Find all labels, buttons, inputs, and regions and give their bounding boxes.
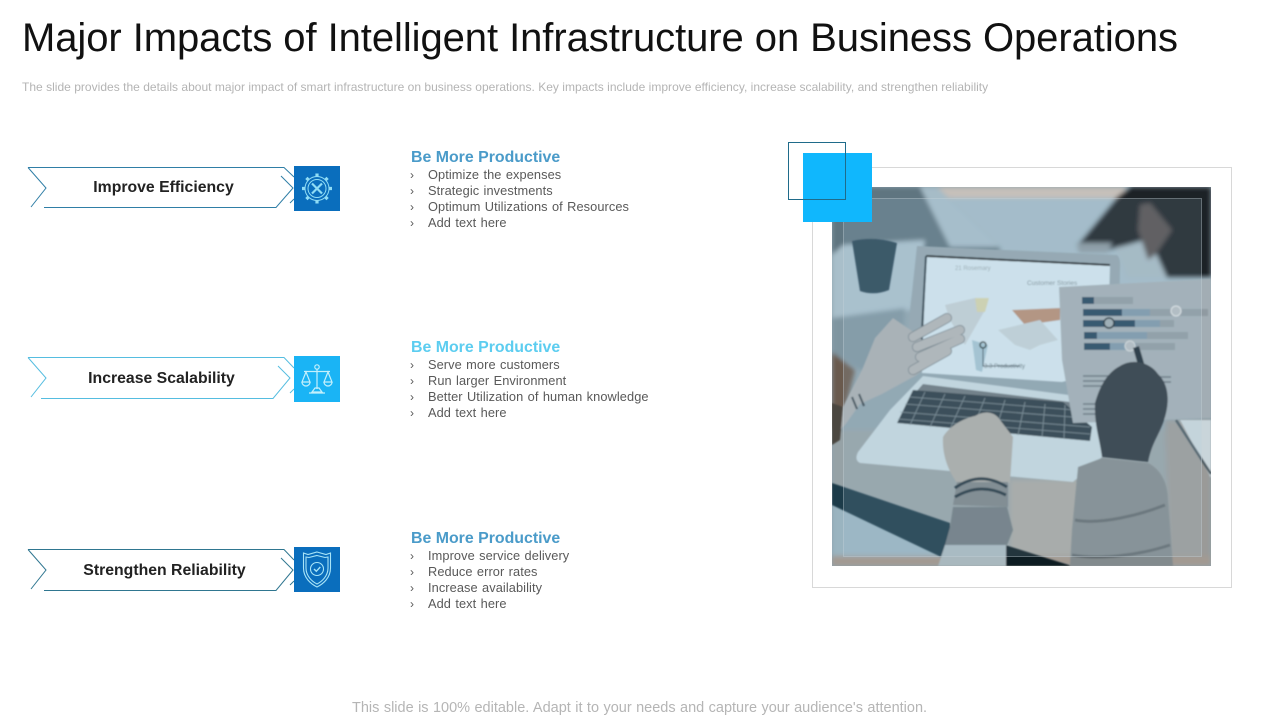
text block: increase scalability details: › [410, 374, 414, 388]
table [832, 430, 833, 436]
text block: improve efficiency details: Be More Productive [411, 149, 560, 166]
text block: increase scalability details: › [410, 406, 414, 420]
middle hand [943, 413, 1013, 483]
translucent inner overlay [844, 198, 1202, 556]
text block: strengthen reliability details: Be More Productive [411, 530, 560, 547]
text block: improve efficiency details [410, 149, 629, 230]
world map [945, 298, 985, 345]
icon: gear with tools [294, 166, 340, 211]
photo: hands at laptop with charts [832, 187, 1211, 566]
label: improve efficiency: Improve Efficiency [93, 178, 234, 196]
text block: improve efficiency details: › [410, 168, 414, 182]
screen captions: 21 Rosemary [955, 266, 991, 272]
notebook edge right [1180, 420, 1211, 478]
text block: improve efficiency details: Strategic investments [428, 183, 553, 198]
photo frame [812, 167, 1232, 588]
text block: increase scalability details: Add text here [428, 405, 507, 420]
person top right [1079, 187, 1211, 278]
cup [852, 239, 897, 293]
laptop deck [856, 376, 1102, 482]
text block: increase scalability details: Better Utilization of human knowledge [428, 389, 649, 404]
right sleeve [1070, 458, 1173, 566]
text block: increase scalability details [410, 339, 649, 420]
paper with chart [1059, 279, 1211, 423]
text block: strengthen reliability details: Increase availability [428, 580, 542, 595]
text block: strengthen reliability details [410, 530, 570, 611]
text block: improve efficiency details: › [410, 216, 414, 230]
accent: outlined square [788, 142, 846, 200]
accent: solid blue square [803, 153, 872, 222]
text block: strengthen reliability details: › [410, 597, 414, 611]
text block: strengthen reliability details: › [410, 549, 414, 563]
background wall [951, 187, 1211, 284]
footer note: This slide is 100% editable. Adapt it to your needs and capture your audience's attention. [352, 700, 927, 716]
text block: improve efficiency details: Optimum Utilizations of Resources [428, 199, 629, 214]
text block: improve efficiency details: Optimize the expenses [428, 167, 561, 182]
text block: strengthen reliability details: › [410, 565, 414, 579]
text block: strengthen reliability details: Reduce error rates [428, 564, 538, 579]
photo: hands at laptop with charts: 3.3 Productivity [984, 364, 1025, 370]
text block: strengthen reliability details: Improve service delivery [428, 548, 569, 563]
photo: hands at laptop with charts: Customer Stories [1027, 280, 1078, 287]
banner: strengthen reliability [28, 549, 294, 591]
background laptop [832, 187, 1000, 260]
pen [1132, 346, 1144, 364]
text block: increase scalability details: Serve more customers [428, 357, 560, 372]
text block: increase scalability details: Run larger Environment [428, 373, 566, 388]
icon: balance scale [294, 356, 340, 402]
text block: increase scalability details: › [410, 390, 414, 404]
banner: increase scalability [28, 357, 294, 399]
label: increase scalability: Increase Scalability [88, 370, 235, 386]
text block: increase scalability details: › [410, 358, 414, 372]
laptop lid [910, 246, 1120, 326]
title: Major Impacts of Intelligent Infrastructure on Business Operations [22, 16, 1178, 60]
text block: strengthen reliability details: Add text here [428, 596, 507, 611]
text block: improve efficiency details: › [410, 184, 414, 198]
right dark hand [1095, 362, 1168, 462]
left hand [832, 318, 960, 445]
paper and notebook on table [832, 240, 925, 320]
text block: improve efficiency details: Add text here [428, 215, 507, 230]
dark strap on table [832, 483, 1010, 566]
subtitle: The slide provides the details about major impact of smart infrastructure on business operations. Key impacts include improve efficiency, increase scalability, and strengthen reliability [22, 80, 988, 94]
banner: improve efficiency [28, 167, 294, 208]
icon: shield with check [294, 547, 340, 592]
text block: improve efficiency details: › [410, 200, 414, 214]
label: strengthen reliability: Strengthen Reliability [83, 562, 246, 578]
text block: increase scalability details: Be More Productive [411, 339, 560, 356]
text block: strengthen reliability details: › [410, 581, 414, 595]
